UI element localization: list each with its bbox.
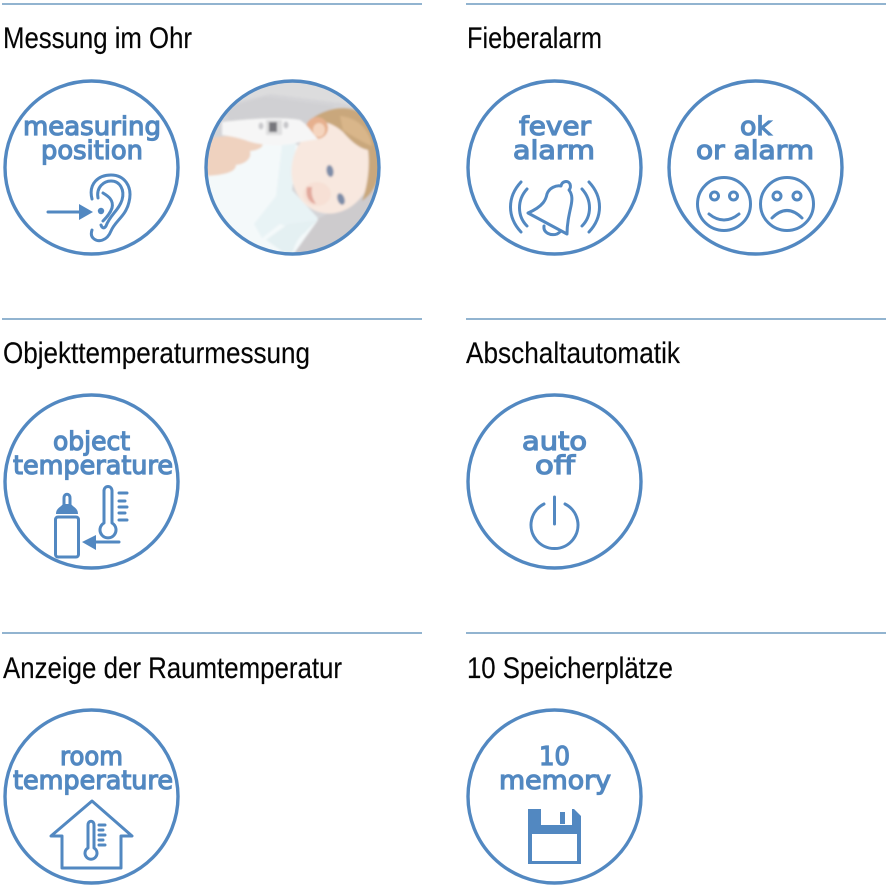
icon: room temperature: [5, 710, 178, 883]
panel: Messung im Ohr: [3, 22, 390, 262]
icon: measuring position: position: [41, 136, 143, 166]
heading: Fieberalarm: Fieberalarm: [467, 22, 602, 55]
icon: ok or alarm smileys: ok: [740, 112, 772, 142]
icon: room temperature: temperature: [13, 766, 173, 796]
icon: measuring position: measuring: [23, 112, 161, 142]
icon: auto off: off: [535, 451, 576, 481]
heading: 10 Speicherplätze: 10 Speicherplätze: [467, 652, 673, 685]
icon: auto off: [468, 395, 641, 568]
icon: 10 memory: [468, 710, 641, 883]
icon: 10 memory: memory: [499, 766, 611, 796]
icon: ok or alarm smileys: or alarm: [696, 136, 814, 166]
icon: fever alarm bell: fever: [519, 112, 591, 142]
heading: Messung im Ohr: Messung im Ohr: [3, 22, 192, 55]
icon: object temperature: temperature: [13, 451, 173, 481]
icon: room temperature: room: [60, 742, 123, 772]
photo: baby with ear thermometer: [204, 79, 381, 256]
icon: fever alarm bell: alarm: [513, 136, 595, 166]
icon: fever alarm bell: [468, 81, 641, 254]
heading: Anzeige der Raumtemperatur: Anzeige der Raumtemperatur: [3, 652, 342, 685]
icon: 10 memory: 10: [539, 742, 570, 772]
panel: 10 Speicherplätze: [467, 652, 673, 883]
panel: Abschaltautomatik: [466, 337, 681, 568]
panel: Objekttemperaturmessung: [3, 337, 310, 568]
icon: ok or alarm smileys: [669, 81, 842, 254]
icon: auto off: auto: [522, 427, 587, 457]
icon: object temperature: [5, 395, 178, 568]
icon: object temperature: object: [53, 427, 130, 457]
heading: Abschaltautomatik: Abschaltautomatik: [466, 337, 681, 370]
panel: Fieberalarm: [467, 22, 842, 254]
panel: Anzeige der Raumtemperatur: [3, 652, 342, 883]
heading: Objekttemperaturmessung: Objekttemperaturmessung: [3, 337, 310, 370]
icon: measuring position: [5, 81, 178, 254]
